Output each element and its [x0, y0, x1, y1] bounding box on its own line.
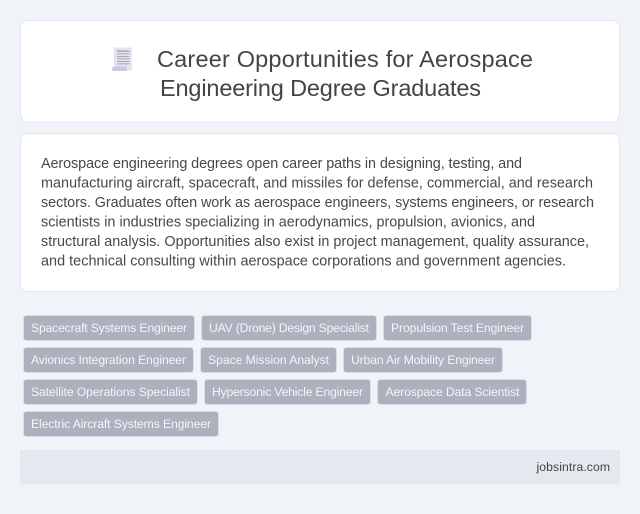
text block: description: and technical consulting within aerospace corporations and government agencies. — [41, 254, 566, 270]
footer text: source: jobsintra.com — [536, 460, 610, 474]
text block: description: sectors. Graduates often work as aerospace engineers, systems engineers, or research — [41, 195, 594, 211]
tag: Space Mission Analyst — [200, 348, 336, 372]
panel: title card — [20, 20, 620, 122]
tag list: job titles — [24, 316, 532, 436]
tag: UAV (Drone) Design Specialist — [202, 316, 376, 340]
tag: Avionics Integration Engineer: Avionics Integration Engineer — [31, 353, 186, 367]
tag: Electric Aircraft Systems Engineer: Electric Aircraft Systems Engineer — [31, 417, 211, 431]
tag: Urban Air Mobility Engineer: Urban Air Mobility Engineer — [351, 353, 495, 367]
tag: Propulsion Test Engineer: Propulsion Test Engineer — [391, 321, 524, 335]
panel: description card — [20, 134, 620, 292]
heading: Engineering Degree Graduates — [160, 75, 481, 101]
tag: Electric Aircraft Systems Engineer — [24, 412, 218, 436]
icon: document scroll — [112, 48, 132, 71]
text block: description: manufacturing aircraft, spacecraft, and missiles for defense, commercial, and research — [41, 176, 593, 192]
text block: description: Aerospace engineering degrees open career paths in designing, testing, and — [41, 156, 522, 172]
tag: Urban Air Mobility Engineer — [344, 348, 502, 372]
tag: Hypersonic Vehicle Engineer: Hypersonic Vehicle Engineer — [212, 385, 363, 399]
tag: Aerospace Data Scientist — [378, 380, 526, 404]
tag: Aerospace Data Scientist: Aerospace Data Scientist — [386, 385, 520, 399]
text block: description — [41, 156, 594, 270]
tag: Satellite Operations Specialist: Satellite Operations Specialist — [31, 385, 191, 399]
text block: description: structural analysis. Opportunities also exist in project management, quality assurance, — [41, 234, 589, 250]
tag: Space Mission Analyst: Space Mission Analyst — [208, 353, 330, 367]
tag: Hypersonic Vehicle Engineer — [204, 380, 370, 404]
tag: Spacecraft Systems Engineer: Spacecraft Systems Engineer — [31, 321, 187, 335]
heading — [157, 46, 533, 101]
text block: description: scientists in industries specializing in aerodynamics, propulsion, avionics, and — [41, 214, 535, 230]
tag: UAV (Drone) Design Specialist: UAV (Drone) Design Specialist — [209, 321, 370, 335]
tag: Spacecraft Systems Engineer — [24, 316, 194, 340]
tag: Satellite Operations Specialist — [24, 380, 198, 404]
heading: Career Opportunities for Aerospace — [157, 46, 533, 72]
tag: Propulsion Test Engineer — [384, 316, 532, 340]
footer bar — [20, 450, 620, 484]
tag: Avionics Integration Engineer — [24, 348, 194, 372]
